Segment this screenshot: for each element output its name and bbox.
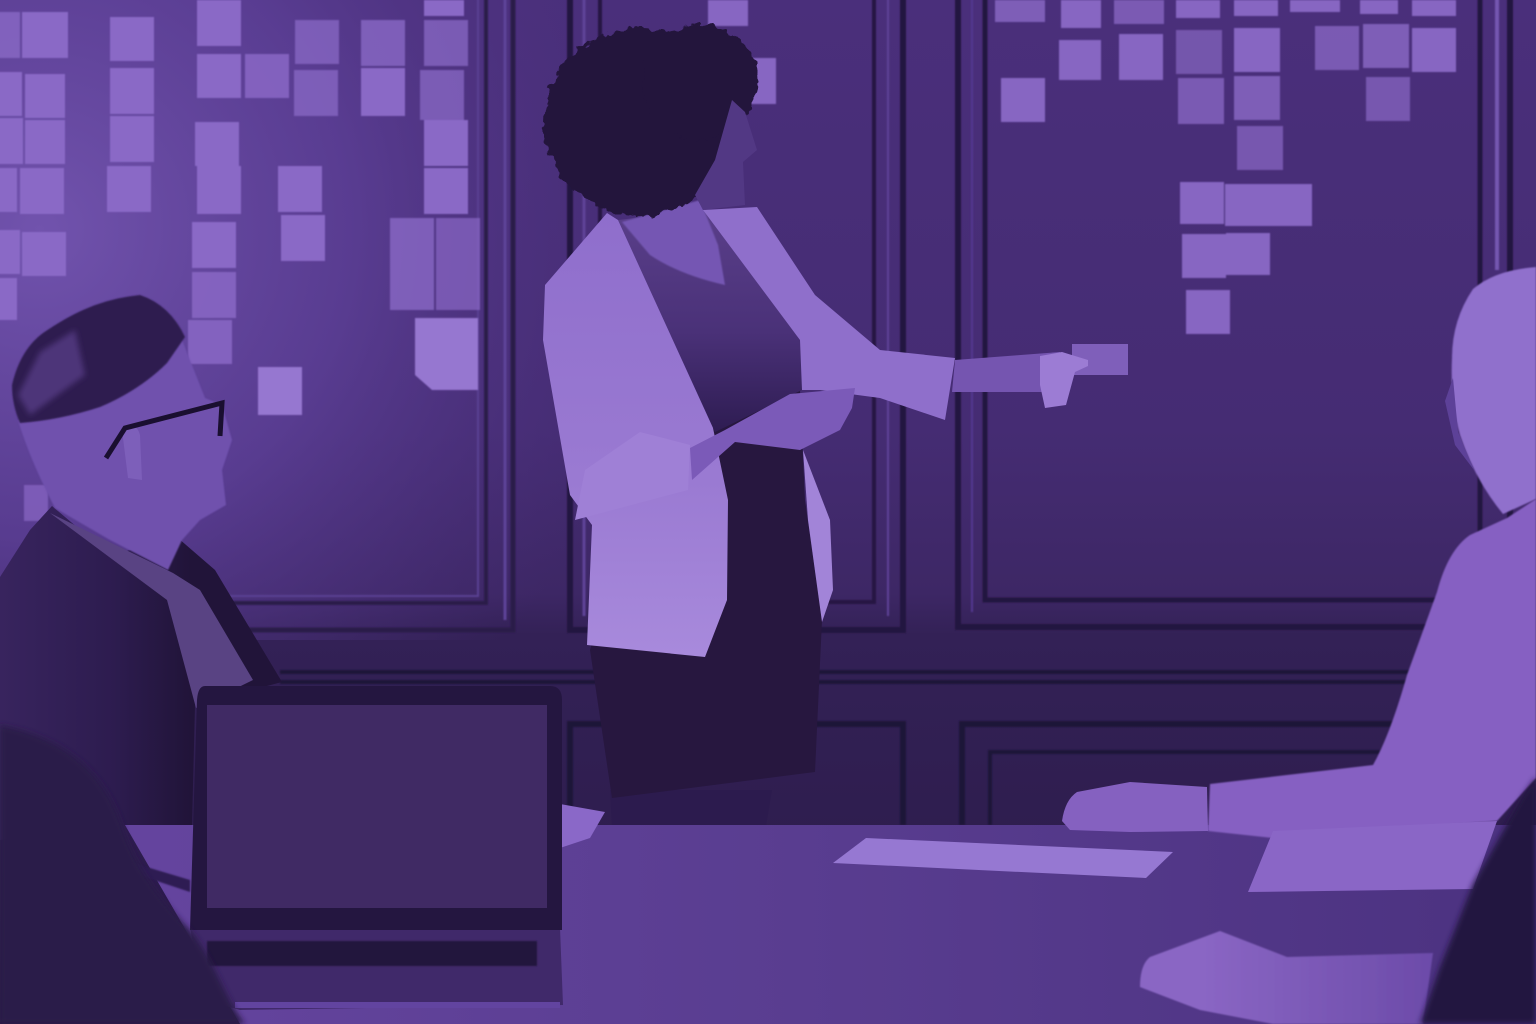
base lip xyxy=(235,1002,560,1008)
pointing hand xyxy=(1040,352,1088,408)
laptop base xyxy=(190,928,563,1010)
hair xyxy=(1452,267,1536,514)
dark foreground figure on left xyxy=(0,725,245,1024)
hand on table xyxy=(1062,782,1208,832)
pointing arm xyxy=(952,352,1075,392)
laptop lid xyxy=(190,686,562,930)
wall panel mouldings xyxy=(0,0,1510,825)
sticky notes: left wall xyxy=(0,0,480,521)
hair highlight xyxy=(18,330,85,415)
blazer left side xyxy=(543,213,728,657)
hair xyxy=(12,295,185,423)
left hand xyxy=(690,388,855,480)
paper on table xyxy=(833,838,1173,878)
ear xyxy=(122,426,142,480)
second hand on lower right xyxy=(1140,931,1433,1024)
seated woman on right xyxy=(1062,267,1536,892)
presenter woman xyxy=(543,24,1128,826)
face xyxy=(695,100,757,210)
face xyxy=(1445,378,1474,470)
draped top xyxy=(618,210,802,432)
curly hair xyxy=(544,24,758,216)
neck and face xyxy=(18,335,232,570)
small white paper near laptop xyxy=(560,804,605,848)
dress xyxy=(590,390,822,798)
legs xyxy=(610,790,772,826)
blazer sleeve cuff xyxy=(575,432,690,520)
blazer right lower panel xyxy=(803,450,833,622)
laptop screen xyxy=(207,705,547,908)
jacket xyxy=(0,506,282,840)
table shadow left of laptop xyxy=(130,862,190,892)
blazer right side xyxy=(703,207,955,420)
table xyxy=(125,804,1536,1024)
laptop xyxy=(190,686,563,1010)
shirt and tie xyxy=(50,513,253,708)
sticky note in hand xyxy=(1072,344,1128,375)
keyboard xyxy=(207,941,537,966)
sticky notes: right wall xyxy=(708,0,1456,334)
glasses xyxy=(106,403,222,458)
blouse xyxy=(1208,499,1536,838)
neck and chest xyxy=(622,200,725,285)
seated man on left xyxy=(0,295,282,840)
dark foreground figure on right xyxy=(1420,777,1536,1024)
documents xyxy=(1248,821,1497,892)
